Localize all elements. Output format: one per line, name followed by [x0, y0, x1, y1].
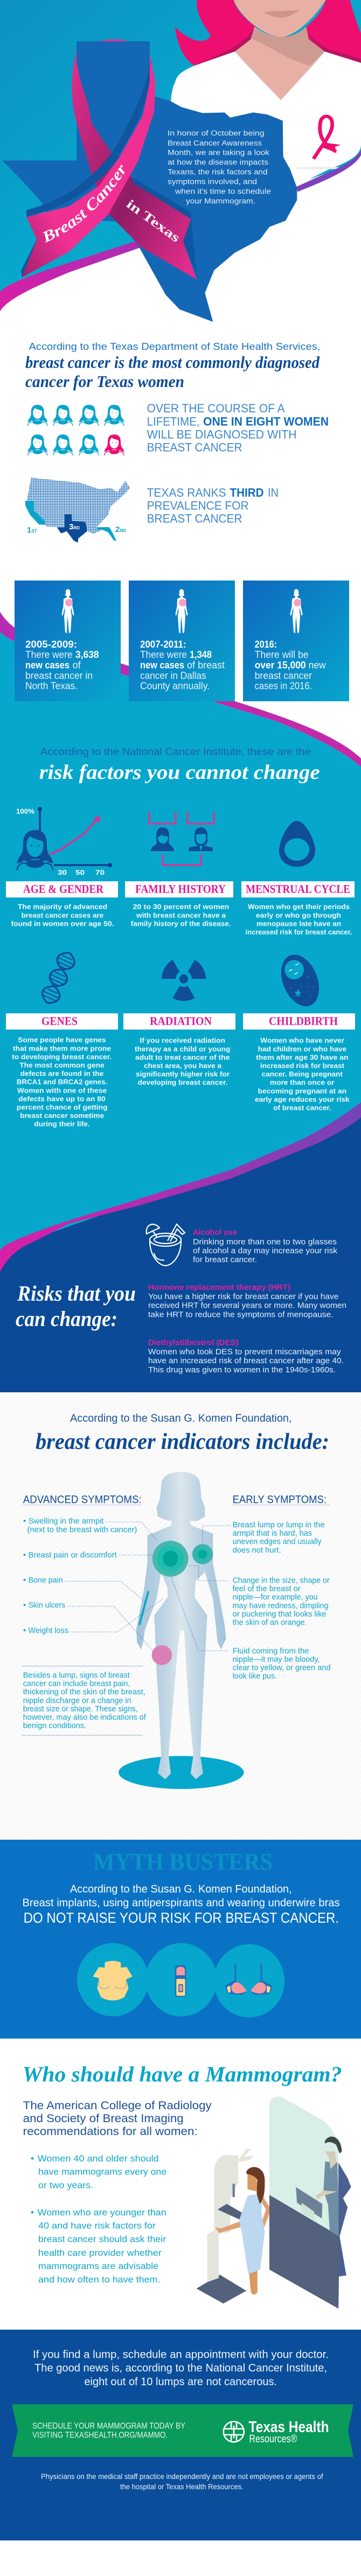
myth text: Breast implants, using antiperspirants and wearing underwire bras	[23, 1897, 339, 1909]
description: increased risk for breast cancer.	[246, 928, 352, 936]
intro text: Breast Cancer Awareness	[168, 139, 262, 147]
banner call to action	[32, 2421, 185, 2440]
card text: over 15,000	[255, 660, 306, 671]
early symptoms list: clear to yellow, or green and	[233, 1663, 331, 1672]
icon: cocktail coconut	[147, 1224, 185, 1266]
skin ulcer marker	[152, 1645, 172, 1665]
advanced symptoms list: •	[23, 1626, 26, 1635]
receptionist	[315, 2137, 351, 2276]
map: US prevalence ranks: 1ST	[27, 526, 37, 535]
ribbon title: in Texas	[123, 197, 183, 245]
text: alcohol use	[193, 1228, 338, 1265]
card text: County annually.	[140, 681, 210, 692]
face	[234, 0, 326, 37]
text: recommendation bullets: Women who are younger than	[38, 2207, 166, 2218]
stat card: 2016	[243, 581, 349, 701]
advanced symptoms list: •	[23, 1550, 26, 1559]
description: The majority of advanced	[18, 903, 107, 911]
note: other signs: thickening of the skin of the breast,	[23, 1688, 145, 1697]
early symptoms list: armpit that is hard, has	[233, 1529, 312, 1538]
dotted leader lines	[66, 1522, 230, 1651]
card text: new	[309, 660, 327, 671]
card text: breast cancer	[255, 670, 312, 681]
icon: swaddled baby	[274, 949, 326, 1012]
note: other signs: however, may also be indications of	[23, 1713, 146, 1722]
footer section	[0, 2330, 361, 2540]
text: Texas ranks third: TEXAS RANKS	[147, 486, 226, 499]
description: cancer. Being pregnant	[262, 1070, 343, 1078]
card text	[140, 639, 225, 692]
text: one in eight women: BREAST CANCER	[147, 441, 242, 454]
early symptoms list: EARLY SYMPTOMS:	[233, 1494, 327, 1506]
description: 20 to 30 percent of women	[133, 903, 229, 911]
early symptoms list: nipple—for example, you	[233, 1593, 318, 1602]
text: one in eight women: WILL BE DIAGNOSED WITH	[147, 427, 297, 441]
text: hormone replacement therapy: take HRT to reduce the symptoms of menopause.	[148, 1310, 334, 1320]
ribbon title: Breast Cancer	[43, 164, 125, 243]
text: diethylstilbestrol: This drug was given to women in the 1940s-1960s.	[148, 1365, 336, 1375]
text: Texas ranks third: BREAST CANCER	[147, 512, 242, 526]
description	[255, 1037, 350, 1111]
label	[243, 1013, 355, 1030]
intro text: at how the disease impacts	[168, 158, 268, 166]
illustration: woman in white coat	[0, 0, 361, 322]
myth title: MYTH BUSTERS	[93, 1848, 273, 1875]
stat card: North Texas	[15, 581, 121, 701]
label	[6, 881, 118, 897]
text: one in eight women: LIFETIME,	[147, 415, 200, 428]
circles	[77, 1943, 284, 2018]
icon: implants torso	[93, 1961, 133, 2000]
logo: Texas Health Resources	[224, 2419, 329, 2445]
heading: risk factors you cannot change: risk factors you cannot change	[39, 761, 320, 784]
description: becoming pregnant at an	[258, 1087, 346, 1095]
card text: North Texas.	[25, 681, 78, 692]
text: recommendations intro	[23, 2100, 212, 2138]
text: recommendation bullets: •	[31, 2153, 34, 2164]
body silhouette	[136, 1472, 226, 1779]
description: increased risk for breast	[260, 1062, 345, 1069]
description: breast cancer cases are	[22, 911, 103, 919]
early symptoms list: may have redness, dimpling	[233, 1601, 329, 1610]
neck	[235, 27, 324, 100]
map: US prevalence ranks	[25, 478, 130, 543]
advanced symptoms list: Breast pain or discomfort	[29, 1550, 117, 1559]
note: other signs: benign conditions.	[23, 1721, 86, 1730]
description: adult to treat cancer of the	[135, 1053, 230, 1061]
text: alcohol use: for breast cancer.	[193, 1255, 257, 1265]
text: diethylstilbestrol: Women who took DES to prevent miscarriages may	[148, 1347, 341, 1356]
card text	[25, 639, 99, 692]
description: chest area, you have a	[144, 1062, 222, 1069]
statistics section heading	[25, 341, 320, 391]
description: Women who have never	[260, 1037, 344, 1045]
text: alcohol use: of alcohol a day may increase your risk	[193, 1246, 338, 1255]
description: early age reduces your risk	[255, 1095, 350, 1103]
intro text: symptoms involved, and	[168, 177, 257, 185]
text: Texas ranks third: PREVALENCE FOR	[147, 499, 249, 512]
icon: radiation	[162, 959, 206, 1001]
intro text: when it's time to schedule	[175, 188, 271, 196]
panel: radiation	[123, 959, 235, 1087]
hair left	[175, 0, 255, 66]
early symptoms list	[232, 1494, 331, 1681]
card text: 1,348	[190, 650, 212, 660]
early symptoms list: or puckering that looks like	[233, 1610, 327, 1619]
description: more than once or	[270, 1079, 335, 1087]
card text: 2005-2009:	[25, 639, 77, 650]
icon: antiperspirant	[175, 1965, 186, 1997]
text: one in eight women: OVER THE COURSE OF A	[147, 402, 285, 415]
early breast marker	[192, 1544, 213, 1564]
early symptoms list: does not hurt.	[233, 1545, 281, 1555]
description: during their life.	[34, 1120, 90, 1128]
floor plate	[196, 2275, 246, 2304]
icon: figure	[61, 589, 74, 633]
early symptoms list: look like pus.	[233, 1672, 277, 1681]
advanced symptoms list: Swelling in the armpit	[29, 1517, 104, 1526]
icon: one in eight women	[27, 405, 124, 455]
description: them after age 30 have an	[256, 1053, 349, 1061]
footer background	[0, 2330, 361, 2540]
text: alcohol use: Alcohol use	[193, 1228, 237, 1237]
pink pin ribbon	[314, 116, 341, 159]
indicators section	[0, 1392, 361, 1840]
card text: 2016:	[255, 639, 277, 650]
text: Texas ranks third: THIRD	[230, 486, 264, 499]
heading: risks that you can change	[16, 1281, 136, 1331]
description	[246, 903, 352, 936]
text: diethylstilbestrol: Diethylstilbestrol (DES)	[148, 1338, 238, 1347]
card text: There were	[25, 650, 73, 660]
hero teal background	[0, 0, 361, 293]
description: BRCA1 and BRCA2 genes.	[17, 1078, 107, 1086]
description: to developing breast cancer.	[12, 1053, 112, 1061]
text: recommendations intro: The American College of Radiology	[23, 2100, 212, 2112]
disclaimer	[41, 2473, 323, 2491]
description: of breast cancer.	[273, 1104, 331, 1111]
card text: There will be	[255, 650, 309, 660]
label: RADIATION	[150, 1014, 212, 1028]
text: recommendation bullets: have mammograms every one	[38, 2167, 166, 2177]
advanced symptoms list: Skin ulcers	[29, 1601, 65, 1610]
description: defects have up to an 80	[18, 1095, 106, 1103]
icon: DNA	[39, 949, 78, 1006]
label	[6, 1013, 118, 1030]
advanced symptoms list: ADVANCED SYMPTOMS:	[23, 1494, 142, 1506]
monitor	[296, 2187, 322, 2220]
advanced symptoms list	[23, 1494, 142, 1635]
card text: of	[73, 660, 81, 671]
logo: Texas Health Resources: Resources®	[249, 2433, 297, 2445]
text: hormone replacement therapy: Hormone replacement therapy (HRT)	[148, 1283, 290, 1292]
disclaimer: Physicians on the medical staff practice independently and are not employees or agents of	[41, 2473, 323, 2481]
note: other signs: cancer can include breast pain,	[23, 1679, 130, 1688]
map: US prevalence ranks: 3RD	[69, 522, 80, 531]
icon: age chart	[16, 807, 112, 876]
mammogram machine	[207, 2149, 253, 2282]
description: The most common gene	[19, 1061, 105, 1069]
label: CHILDBIRTH	[269, 1014, 338, 1028]
description	[11, 903, 114, 928]
description	[12, 1036, 112, 1128]
myth background	[0, 1840, 361, 2039]
panel: genes	[6, 949, 118, 1128]
heading: risk factors you cannot change	[39, 746, 320, 784]
card text: 2007-2011:	[140, 639, 186, 650]
intro text	[168, 129, 271, 205]
heading: breast cancer indicators	[36, 1413, 329, 1454]
icon: age chart: 30	[58, 868, 67, 876]
text: recommendation bullets: mammograms are advisable	[38, 2261, 158, 2271]
note: other signs: breast size or shape. These signs,	[23, 1704, 138, 1714]
text: recommendation bullets: •	[31, 2207, 34, 2218]
panel: family history	[125, 812, 233, 928]
note: other signs: Besides a lump, signs of breast	[23, 1670, 130, 1680]
card text: new cases	[140, 660, 184, 671]
description: significantly higher risk for	[136, 1070, 230, 1078]
description: percent chance of getting	[17, 1103, 108, 1111]
label	[123, 1013, 235, 1030]
card text: of breast	[187, 660, 225, 671]
banner call to action: SCHEDULE YOUR MAMMOGRAM TODAY BY	[32, 2421, 185, 2430]
icon: age chart: 100%	[16, 807, 34, 815]
panel: age and gender	[6, 807, 118, 928]
advanced symptoms list: •	[23, 1517, 26, 1526]
panel: childbirth	[243, 949, 355, 1111]
text: hormone replacement therapy: received HRT for several years or more. Many women	[148, 1301, 346, 1310]
hair right	[306, 0, 361, 63]
description: early or who go through	[256, 911, 341, 919]
footer message	[33, 2349, 329, 2388]
myth text	[23, 1883, 339, 1926]
heading: breast cancer indicators: breast cancer indicators include:	[36, 1429, 329, 1454]
text: recommendation bullets	[31, 2153, 166, 2284]
intro text: Texans, the risk factors and	[168, 168, 267, 176]
body diagram	[66, 1472, 244, 1789]
myth icons	[77, 1943, 284, 2018]
awareness ribbon	[21, 39, 197, 280]
early symptoms list: nipple—it may be bloody,	[233, 1655, 320, 1664]
description: Women with one of these	[17, 1086, 107, 1094]
label: AGE & GENDER	[23, 882, 104, 896]
purple band right	[296, 149, 361, 192]
text: Texas ranks third: IN	[268, 486, 279, 499]
description: that make them more prone	[13, 1044, 111, 1052]
ribbon shadow	[26, 151, 120, 217]
indicators background	[0, 1392, 361, 1840]
text: hormone replacement therapy: You have a higher risk for breast cancer if you have	[148, 1292, 338, 1301]
text: recommendation bullets: and how often to have them.	[38, 2274, 161, 2284]
description: breast cancer sometime	[20, 1111, 104, 1120]
description: menopause late have an	[256, 920, 341, 928]
card text	[255, 639, 327, 692]
coat	[171, 52, 361, 185]
text: recommendation bullets: Women 40 and older should	[38, 2153, 159, 2164]
intro text: Month, we are taking a look	[168, 148, 269, 156]
description: Women who get their periods	[248, 903, 350, 911]
icon: age chart: 50	[75, 868, 85, 876]
description: had children or who have	[258, 1045, 346, 1053]
text: recommendation bullets: breast cancer should ask their	[38, 2234, 166, 2244]
statistics section heading: cancer for Texas women	[25, 372, 184, 391]
card text: cancer in Dallas	[140, 670, 206, 681]
logo: Texas Health Resources: Texas Health	[249, 2419, 329, 2436]
advanced symptoms list: Weight loss	[29, 1626, 68, 1635]
hero section	[0, 0, 361, 322]
description: found in women over age 50.	[11, 920, 114, 928]
label: FAMILY HISTORY	[135, 882, 226, 896]
intro text: In honor of October being	[168, 129, 264, 137]
early symptoms list: the skin of an orange.	[233, 1618, 307, 1627]
patient	[216, 2167, 271, 2295]
footer message: The good news is, according to the National Cancer Institute,	[34, 2363, 327, 2374]
description: therapy as a child or young	[135, 1045, 230, 1053]
advanced symptoms list: •	[23, 1576, 26, 1585]
ribbon back tail	[72, 52, 197, 280]
description: developing breast cancer.	[138, 1079, 227, 1087]
text: diethylstilbestrol: have an increased risk of breast cancer after age 40.	[148, 1356, 344, 1365]
advanced symptoms list: (next to the breast with cancer)	[27, 1525, 137, 1534]
heading: who should have a mammogram: Who should have a Mammogram?	[23, 2062, 342, 2086]
description: Some people have genes	[18, 1036, 106, 1044]
map: US prevalence ranks: 2ND	[115, 525, 126, 534]
icon: figure	[290, 589, 303, 633]
early symptoms list: Change in the size, shape or	[233, 1576, 330, 1585]
stat card: Dallas County	[129, 581, 235, 701]
banner call to action: VISITING TEXASHEALTH.ORG/MAMMO.	[32, 2431, 168, 2440]
wall panel	[269, 2096, 338, 2236]
text: hormone replacement therapy	[148, 1283, 346, 1320]
text: one in eight women: ONE IN EIGHT WOMEN	[203, 415, 329, 428]
heading: risks that you can change: can change:	[16, 1307, 117, 1331]
note: other signs: nipple discharge or a change in	[23, 1696, 131, 1705]
advanced breast marker	[152, 1541, 189, 1577]
footer message: If you find a lump, schedule an appointment with your doctor.	[33, 2349, 329, 2360]
magenta band left	[0, 240, 141, 312]
card text: cases in 2016.	[255, 681, 312, 692]
bone marker	[140, 1591, 149, 1625]
text: recommendation bullets: or two years.	[38, 2180, 93, 2191]
disclaimer: the hospital or Texas Health Resources.	[120, 2483, 244, 2491]
text: recommendations intro: recommendations for all women:	[23, 2125, 198, 2138]
text: alcohol use: Drinking more than one to two glasses	[193, 1237, 337, 1246]
heading: risk factors you cannot change: According to the National Cancer Institute, these are the	[40, 746, 311, 757]
card text: breast cancer in	[25, 670, 93, 681]
text: Texas ranks third	[147, 486, 279, 526]
ground ellipse	[119, 1756, 244, 1789]
advanced symptoms list: •	[23, 1601, 26, 1610]
early symptoms list: feel of the breast or	[233, 1584, 301, 1593]
footer message: eight out of 10 lumps are not cancerous.	[84, 2376, 277, 2388]
statistics section heading: breast cancer is the most commonly diagnosed	[25, 353, 320, 372]
early symptoms list: Breast lump or lump in the	[233, 1520, 325, 1529]
icon: family tree	[149, 812, 214, 865]
text: recommendations intro: and Society of Breast Imaging	[23, 2112, 184, 2125]
heading: risks that you can change: Risks that you	[17, 1281, 136, 1306]
text: recommendation bullets: 40 and have risk factors for	[38, 2221, 156, 2231]
icon: egg	[279, 821, 315, 867]
teal risk section background with magenta band	[0, 612, 361, 1392]
early symptoms list: uneven edges and usually	[233, 1537, 322, 1546]
icon: underwire bra	[225, 1964, 272, 1995]
label: GENES	[41, 1014, 78, 1028]
green banner	[12, 2404, 353, 2457]
statistics section heading: According to the Texas Department of State Health Services,	[29, 341, 320, 352]
description: with breast cancer have a	[136, 911, 226, 919]
counter	[269, 2195, 339, 2309]
heading: breast cancer indicators: According to the Susan G. Komen Foundation,	[70, 1413, 292, 1425]
intro text: your Mammogram.	[186, 197, 255, 205]
description	[135, 1037, 230, 1087]
description: family history of the disease.	[131, 920, 231, 928]
description: If you received radiation	[140, 1037, 225, 1045]
ribbon front strand	[22, 54, 155, 278]
description: defects are found in the	[20, 1069, 103, 1078]
note: other signs	[22, 1666, 146, 1735]
text: diethylstilbestrol	[148, 1338, 344, 1375]
text: one in eight women	[147, 402, 329, 454]
text: recommendation bullets: health care provider whether	[38, 2248, 162, 2258]
icon: figure	[176, 589, 188, 633]
ribbon inner blue	[77, 42, 150, 151]
advanced symptoms list: Bone pain	[29, 1576, 63, 1585]
ribbon title	[43, 164, 183, 245]
description	[131, 903, 231, 928]
card text: There were	[140, 650, 187, 660]
early symptoms list: Fluid coming from the	[233, 1646, 309, 1655]
illustration: mammogram clinic	[196, 2096, 351, 2309]
card text: new cases	[25, 660, 70, 671]
myth text: According to the Susan G. Komen Foundation,	[70, 1883, 292, 1895]
myth busters section	[0, 1840, 361, 2039]
card text: 3,638	[75, 650, 99, 660]
icon: age chart: 70	[95, 868, 105, 876]
state of Texas shape	[2, 42, 297, 322]
panel: menstrual cycle	[241, 821, 355, 936]
